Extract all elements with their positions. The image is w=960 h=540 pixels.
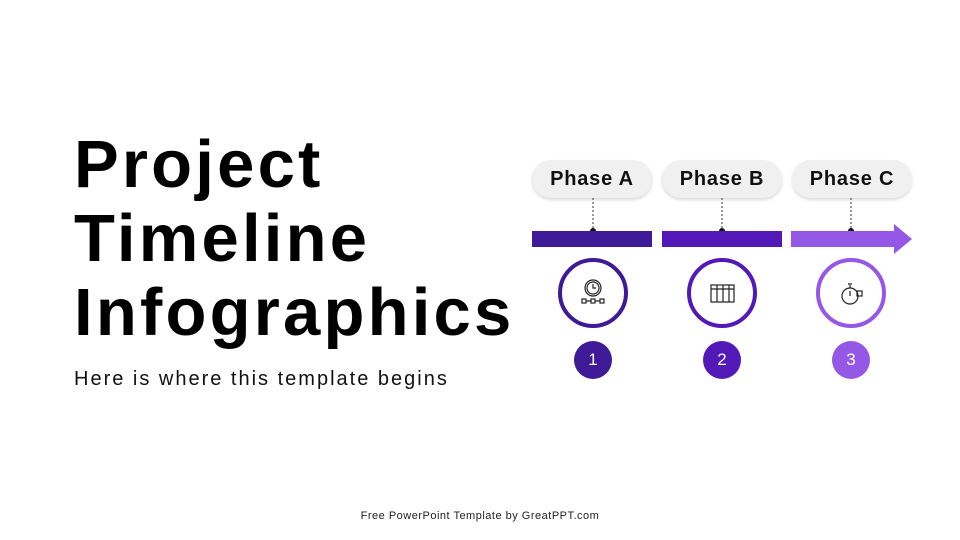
number badge 1: 1 <box>588 350 598 369</box>
pill: Phase A: Phase A <box>550 168 634 190</box>
icon ring 2: calendar <box>687 258 757 328</box>
number badge 3 <box>832 341 870 379</box>
number badge 1 <box>574 341 612 379</box>
number badge 2 <box>703 341 741 379</box>
footer: Free PowerPoint Template by GreatPPT.com <box>361 510 599 522</box>
pill: Phase C: Phase C <box>810 168 894 190</box>
pill: Phase B: Phase B <box>680 168 764 190</box>
title: Infographics <box>74 275 514 350</box>
title <box>74 127 514 350</box>
timeline <box>531 160 913 254</box>
subtitle: Here is where this template begins <box>74 368 449 390</box>
pill: Phase C <box>792 160 912 198</box>
title: Timeline <box>74 201 370 276</box>
number badge 2: 2 <box>717 350 727 369</box>
icon ring 3: stopwatch <box>816 258 886 328</box>
title: Project <box>74 127 324 202</box>
icon ring 1: clock <box>558 258 628 328</box>
number badge 3: 3 <box>846 350 856 369</box>
pill: Phase A <box>532 160 652 198</box>
timeline bars and connectors <box>532 198 912 254</box>
pill: Phase B <box>662 160 782 198</box>
